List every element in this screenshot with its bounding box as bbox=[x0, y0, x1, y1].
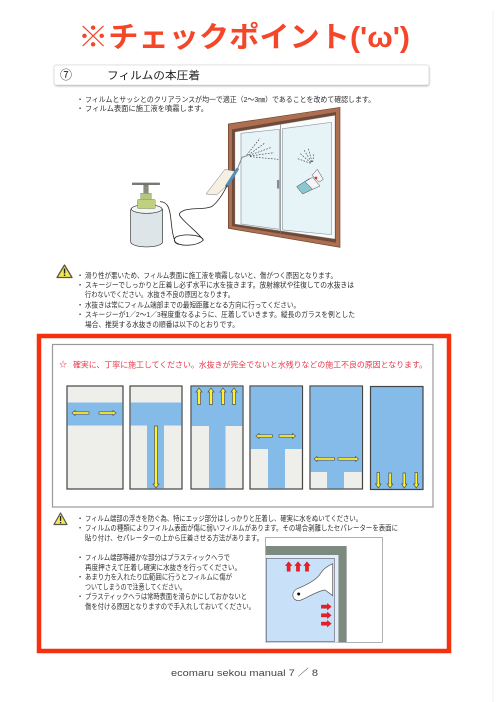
lower notes: フィルム端部の浮きを防ぐ為、特にエッジ部分はしっかりと圧着し、確実に水をぬいてください。 bbox=[85, 514, 362, 523]
step 6 bbox=[370, 386, 423, 490]
caution text: ・ bbox=[76, 300, 84, 310]
squeegee and hand bbox=[206, 155, 248, 195]
heading text: フィルムの本圧着 bbox=[107, 68, 200, 82]
red arrows right bbox=[321, 603, 331, 627]
pressure tank bbox=[131, 183, 163, 247]
footer: ecomaru sekou manual 7 ／ 8 bbox=[171, 668, 318, 679]
caution text: スキージーが1／2～1／3程度重なるように、圧着していきます。縦長のガラスを例とした bbox=[85, 310, 355, 319]
caution text: 水抜きは常にフィルム端部までの最短距離となる方向に行ってください。 bbox=[85, 300, 300, 310]
caution text: ・ bbox=[76, 271, 84, 280]
intro text: ・ bbox=[76, 95, 84, 104]
caution text bbox=[76, 271, 355, 329]
warning sentence: 確実に、丁寧に施工してください。水抜きが完全でないと水残りなどの施工不良の原因となります。 bbox=[73, 360, 427, 370]
glass panes bbox=[235, 115, 335, 239]
warning icon 1 bbox=[57, 265, 72, 278]
lower notes: ・ bbox=[76, 553, 84, 562]
title: ※チェックポイント('ω') bbox=[78, 21, 410, 54]
step 4 bbox=[250, 386, 302, 489]
red arrows up bbox=[285, 562, 310, 571]
lower notes: ついてしまうので注意してください。 bbox=[85, 582, 186, 592]
step 2 bbox=[130, 386, 182, 489]
lower notes: フィルムの種類によりフィルム表面が傷に弱いフィルムがあります。その場合剥離したセパレーターを表面に bbox=[85, 524, 398, 532]
lower notes bbox=[76, 514, 398, 611]
hose bbox=[160, 185, 227, 245]
heading number: ⑦ bbox=[60, 68, 72, 82]
caution text: 場合、推奨する水抜きの順番は以下のとおりです。 bbox=[85, 320, 239, 329]
caution text: 滑り性が悪いため、フィルム表面に施工液を噴霧しないと、傷がつく原因となります。 bbox=[85, 271, 337, 280]
lower notes: フィルム端部等細かな部分はプラスティックヘラで bbox=[85, 553, 230, 562]
lower notes: あまり力を入れたり広範囲に行うとフィルムに傷が bbox=[85, 572, 232, 582]
lower notes: ・ bbox=[76, 592, 84, 601]
spray lines bbox=[247, 138, 314, 163]
intro text: フィルムとサッシとのクリアランスが均一で適正（2～3㎜）であることを改めて確認します。 bbox=[85, 95, 375, 104]
warning sentence: ☆ bbox=[59, 360, 67, 369]
caution text: スキージーでしっかりと圧着し必ず水平に水を抜きます。放射線状や往復しての水抜きは bbox=[85, 280, 354, 290]
lower notes: 再度押さえて圧着し確実に水抜きを行ってください。 bbox=[85, 563, 241, 572]
spray bottle bbox=[297, 169, 323, 194]
illustration: window with sprayer bbox=[131, 107, 340, 247]
window frame bbox=[228, 107, 340, 247]
step 1 bbox=[67, 386, 123, 489]
lower notes: ・ bbox=[76, 524, 84, 532]
lower notes: 貼り付け、セパレーターの上から圧着させる方法があります。 bbox=[85, 534, 263, 542]
lower notes: ・ bbox=[76, 572, 84, 582]
intro text bbox=[76, 95, 375, 113]
spatula bbox=[293, 564, 333, 601]
step 5 bbox=[310, 386, 362, 489]
step 3 bbox=[191, 386, 243, 489]
red highlight frame bbox=[39, 336, 449, 651]
illustration: plastic spatula on film edge bbox=[266, 537, 382, 642]
intro text: ・ bbox=[76, 104, 84, 113]
caution text: ・ bbox=[76, 310, 84, 319]
lower notes: ・ bbox=[76, 514, 84, 523]
inner diagram panel bbox=[52, 344, 433, 507]
caution text: ・ bbox=[76, 280, 84, 290]
heading bar bbox=[54, 65, 429, 86]
lower notes: プラスティックヘラは常時表面を滑らかにしておかないと bbox=[85, 592, 247, 601]
lower notes: 傷を付ける原因となりますので手入れしておいてください。 bbox=[85, 602, 255, 611]
intro text: フィルム表面に施工液を噴霧します。 bbox=[85, 104, 208, 113]
warning icon 2 bbox=[54, 513, 67, 524]
caution text: 行わないでください。水抜き不良の原因となります。 bbox=[85, 290, 234, 299]
